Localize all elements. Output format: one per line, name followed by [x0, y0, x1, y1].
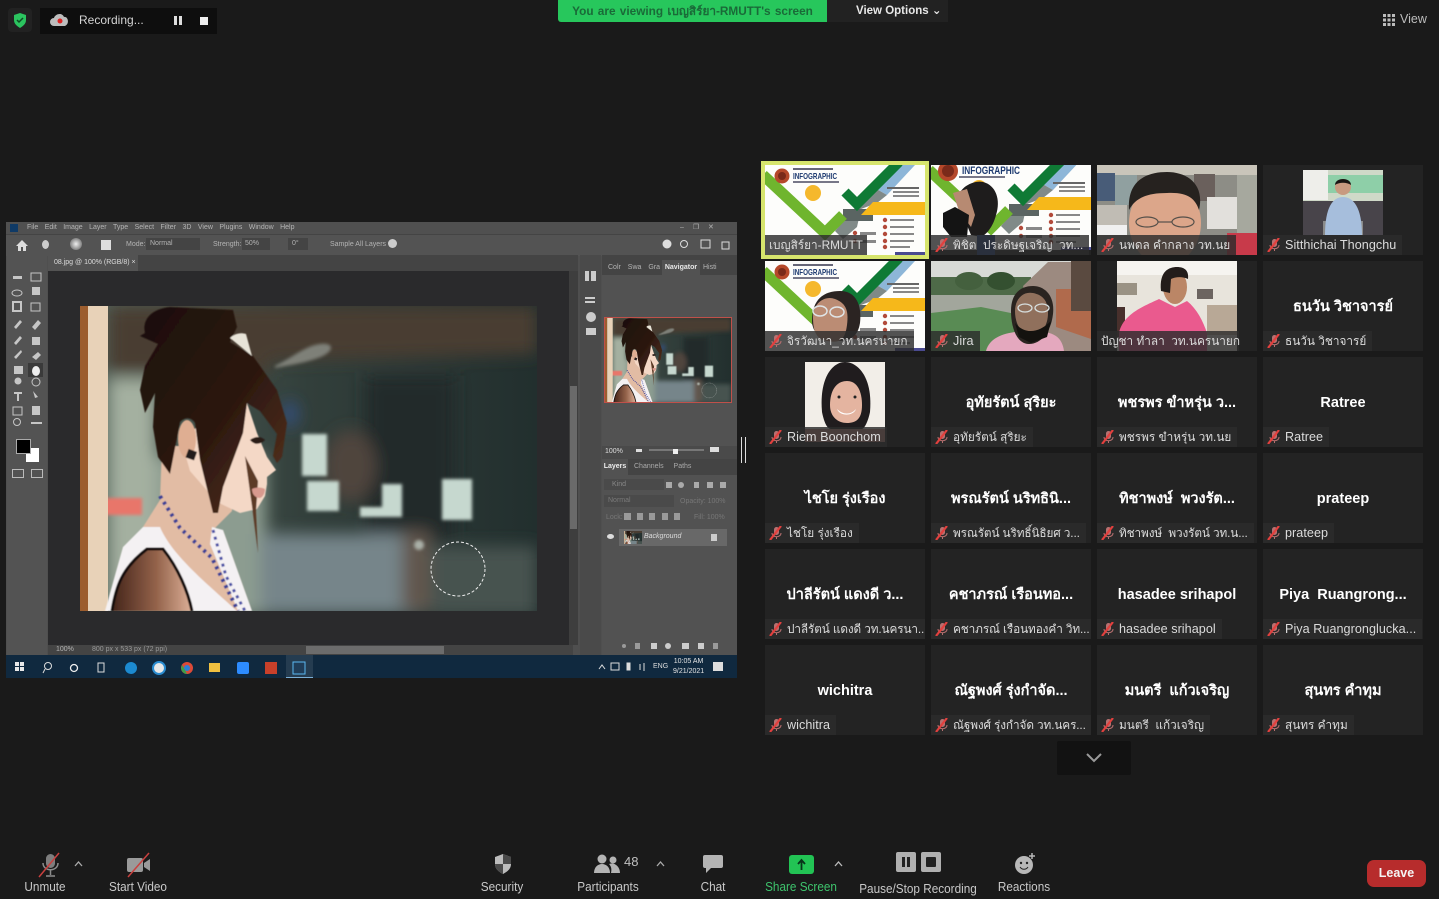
- tile: man with glasses in office: [1097, 165, 1257, 255]
- toolbar: participants: 48: [624, 854, 638, 869]
- tile: prateep: prateep: [1285, 526, 1328, 540]
- tile: ณัฐพงศ์ รุ่งกำจัด: [931, 645, 1091, 735]
- photoshop options bar: 50%: [245, 240, 259, 247]
- tile: Piya Ruangrong: Piya Ruangrong...: [1279, 587, 1407, 603]
- zoom slider: [602, 446, 737, 459]
- tile: พรณรัตน์ นริทธินิ: [931, 453, 1091, 543]
- toolbar: share screen: Share Screen: [765, 880, 837, 894]
- tile: woman with glasses over slide: [765, 261, 925, 351]
- tools sidebar: [7, 255, 47, 655]
- toolbar: unmute: Unmute: [24, 880, 66, 894]
- navigator panel: Navigator: [665, 264, 697, 271]
- navigator panel: [602, 255, 737, 455]
- tile: มนตรี แก้วเจริญ: [1097, 645, 1257, 735]
- toolbar: participants caret: [656, 861, 664, 866]
- tile: man in black mask over slide: [931, 165, 1091, 255]
- layers panel: Lock:: [606, 514, 623, 521]
- toolbar: unmute: [24, 852, 66, 894]
- status bar: 100%: [56, 646, 74, 653]
- tile: อุทัยรัตน์ สุริยะ: [931, 357, 1091, 447]
- layers panel: [602, 459, 737, 655]
- layers panel: Normal: [608, 497, 631, 504]
- tile: Ratree: Ratree: [1320, 395, 1366, 411]
- recording status pill: Recording...: [79, 13, 144, 27]
- tile: ณัฐพงศ์ รุ่งกำจัด: ณัฐพงศ์ รุ่งกำจัด วท.นคร...: [953, 718, 1086, 732]
- foreground and background colour swatches: [16, 439, 31, 454]
- tile: สุนทร คำทุม: [1263, 645, 1423, 735]
- tile: woman with glasses over slide: INFOGRAPHIC: [793, 267, 837, 277]
- photoshop options bar: Mode:: [126, 241, 145, 248]
- tile: presenter slide: [765, 165, 925, 255]
- photoshop menu bar: File Edit Image Layer Type Select Filter 3D View Plugins Window Help: [27, 224, 295, 231]
- tile: Sitthichai Thongchu: [1263, 165, 1423, 255]
- toolbar: pause and stop recording: [859, 852, 977, 896]
- photo on canvas: [80, 306, 537, 611]
- toolbar: participants: Participants: [577, 880, 639, 894]
- layers panel: Layers: [604, 463, 626, 470]
- tile: active speaker highlight: [761, 161, 929, 259]
- tile: hasadee srihapol: hasadee srihapol: [1118, 587, 1236, 603]
- layers panel: Opacity: 100%: [680, 498, 726, 505]
- tile: Sitthichai Thongchu: Sitthichai Thongchu: [1285, 238, 1396, 252]
- tile: คชาภรณ์ เรือนทอ: คชาภรณ์ เรือนทองคำ วิท...: [953, 622, 1090, 636]
- tile: พชรพร ขำหรุ่น: [1097, 357, 1257, 447]
- tile: Riem Boonchom: [765, 357, 925, 447]
- tile: สุนทร คำทุม: สุนทร คำทุม: [1285, 718, 1348, 732]
- navigator panel: Histi: [703, 264, 717, 271]
- view options button: [827, 0, 948, 22]
- tile: man in black mask over slide: INFOGRAPHIC: [962, 165, 1020, 177]
- viewing banner: [558, 0, 827, 22]
- windows taskbar: [6, 655, 737, 678]
- tile: มนตรี แก้วเจริญ: มนตรี แก้วเจริญ: [1125, 683, 1229, 699]
- tile: Ratree: Ratree: [1285, 430, 1323, 444]
- toolbar: pause and stop recording: Pause/Stop Recording: [859, 882, 977, 896]
- view layout button: [1383, 12, 1427, 26]
- tile: presenter slide: เบญสิร์ยา-RMUTT: [769, 238, 863, 252]
- windows taskbar: ENG: [653, 663, 668, 670]
- toolbar: security: [481, 854, 524, 894]
- tile: wichitra: wichitra: [787, 718, 830, 732]
- tile: man in black mask over slide: พิชิต ประดิษฐเจริญ วท...: [953, 238, 1083, 252]
- tile: Piya Ruangrong: [1263, 549, 1423, 639]
- tile: สุนทร คำทุม: สุนทร คำทุม: [1304, 683, 1382, 699]
- tile: ปาลีรัตน์ แดงดี: ปาลีรัตน์ แดงดี วท.นครนา...: [787, 622, 925, 636]
- tile: ไชโย รุ่งเรือง: [765, 453, 925, 543]
- viewing banner: You are viewing เบญสิร์ยา-RMUTT's screen: [572, 4, 813, 18]
- tile: มนตรี แก้วเจริญ: มนตรี แก้วเจริญ: [1119, 718, 1204, 732]
- tile: woman with glasses over slide: จิรวัฒนา_วท.นครนายก: [787, 334, 908, 348]
- tile: ทิชาพงษ์ พวงรัต: ทิชาพงษ์ พวงรัต...: [1119, 491, 1235, 507]
- background layer row: [619, 529, 727, 546]
- recording status pill: [40, 8, 217, 34]
- tile: ปาลีรัตน์ แดงดี: ปาลีรัตน์ แดงดี ว...: [787, 587, 903, 603]
- tile: Riem Boonchom: Riem Boonchom: [787, 430, 881, 444]
- canvas workspace: [48, 271, 573, 645]
- tile: ปาลีรัตน์ แดงดี: [765, 549, 925, 639]
- tile: ไชโย รุ่งเรือง: ไชโย รุ่งเรือง: [787, 526, 853, 540]
- document tab: 08.jpg @ 100% (RGB/8) ×: [54, 259, 136, 266]
- tile: ธนวัน วิชาจารย์: [1263, 261, 1423, 351]
- tile: ทิชาพงษ์ พวงรัต: ทิชาพงษ์ พวงรัตน์ วท.น...: [1119, 526, 1248, 540]
- toolbar: share screen: [765, 855, 837, 894]
- layers panel: Channels Paths: [634, 463, 691, 470]
- tile: พชรพร ขำหรุ่น: พชรพร ขำหรุ่น ว...: [1118, 395, 1236, 411]
- tile: Jira by the river: [931, 261, 1091, 351]
- status bar: 800 px x 533 px (72 ppi): [92, 646, 167, 653]
- toolbar: participants: [577, 854, 639, 894]
- toolbar: reactions: Reactions: [998, 880, 1050, 894]
- photoshop menu bar: – ❐ ✕: [680, 224, 714, 231]
- toolbar: security: Security: [481, 880, 523, 894]
- tile: man in pink shirt: [1097, 261, 1257, 351]
- panel: shared Photoshop window: [6, 222, 737, 678]
- panel: participant gallery: [761, 161, 1423, 735]
- photoshop options bar: 0°: [292, 240, 299, 247]
- tile: พชรพร ขำหรุ่น: พชรพร ขำหรุ่น วท.นย: [1119, 430, 1231, 444]
- layers panel: Fill: 100%: [694, 514, 725, 521]
- tile: คชาภรณ์ เรือนทอ: คชาภรณ์ เรือนทอ...: [949, 587, 1073, 603]
- leave button: Leave: [1379, 866, 1414, 880]
- tile: wichitra: [765, 645, 925, 735]
- tile: ธนวัน วิชาจารย์: ธนวัน วิชาจารย์: [1293, 299, 1393, 315]
- view layout button: View: [1400, 12, 1427, 26]
- layers panel: Kind: [612, 481, 626, 488]
- toolbar: start video: Start Video: [109, 880, 167, 894]
- photoshop menu bar: [6, 222, 737, 234]
- toolbar: audio menu caret: [74, 861, 82, 866]
- tile: ไชโย รุ่งเรือง: ไชโย รุ่งเรือง: [805, 491, 885, 507]
- toolbar: share caret: [834, 861, 842, 866]
- tile: presenter slide: INFOGRAPHIC: [793, 171, 837, 181]
- vertical scrollbar: [569, 271, 578, 645]
- navigator panel: 100%: [605, 448, 623, 455]
- windows taskbar: 9/21/2021: [673, 668, 704, 675]
- toolbar: chat: [701, 855, 726, 894]
- tile: พรณรัตน์ นริทธินิ: พรณรัตน์ นริทธินิ...: [951, 491, 1071, 507]
- photoshop options bar: Strength:: [213, 241, 241, 248]
- photoshop options bar: Sample All Layers: [330, 241, 386, 248]
- tile: prateep: [1263, 453, 1423, 543]
- next page arrow button: [1057, 741, 1131, 775]
- photoshop options bar: Normal: [150, 240, 173, 247]
- toolbar: chat: Chat: [701, 880, 725, 894]
- tile: hasadee srihapol: hasadee srihapol: [1119, 622, 1216, 636]
- toolbar: start video: [109, 852, 167, 894]
- tile: อุทัยรัตน์ สุริยะ: อุทัยรัตน์ สุริยะ: [966, 395, 1056, 411]
- navigator panel: Colr Swa Gra Patt: [608, 264, 679, 271]
- tile: พรณรัตน์ นริทธินิ: พรณรัตน์ นริทธิ์นิธิยศ ว...: [953, 526, 1080, 540]
- tile: คชาภรณ์ เรือนทอ: [931, 549, 1091, 639]
- security shield badge: [8, 8, 32, 32]
- document tab: [48, 255, 578, 271]
- toolbar: reactions: [998, 853, 1050, 894]
- tile: ธนวัน วิชาจารย์: ธนวัน วิชาจารย์: [1285, 334, 1366, 348]
- tile: man with glasses in office: นพดล คำกลาง วท.นย: [1119, 238, 1230, 252]
- background layer row: Background: [644, 533, 681, 540]
- tile: Ratree: [1263, 357, 1423, 447]
- collapsed panel strip: [580, 255, 601, 655]
- status bar: [48, 645, 573, 655]
- tile: wichitra: wichitra: [818, 683, 872, 699]
- view options button: View Options ⌄: [856, 5, 941, 17]
- leave button: [1367, 860, 1426, 887]
- tile: man in pink shirt: ปัญชา ทำลา วท.นครนายก: [1101, 334, 1240, 348]
- tile: Piya Ruangrong: Piya Ruangronglucka...: [1285, 622, 1416, 636]
- navigator thumbnail: [604, 317, 732, 403]
- tile: อุทัยรัตน์ สุริยะ: อุทัยรัตน์ สุริยะ: [953, 430, 1027, 444]
- tile: hasadee srihapol: [1097, 549, 1257, 639]
- tile: prateep: prateep: [1317, 491, 1369, 507]
- photoshop options bar: [6, 234, 737, 256]
- tile: ณัฐพงศ์ รุ่งกำจัด: ณัฐพงศ์ รุ่งกำจัด...: [954, 683, 1068, 699]
- windows taskbar: 10:05 AM: [674, 658, 703, 665]
- panel divider handle: [741, 437, 746, 463]
- tile: ทิชาพงษ์ พวงรัต: [1097, 453, 1257, 543]
- tile: Jira by the river: Jira: [953, 334, 974, 348]
